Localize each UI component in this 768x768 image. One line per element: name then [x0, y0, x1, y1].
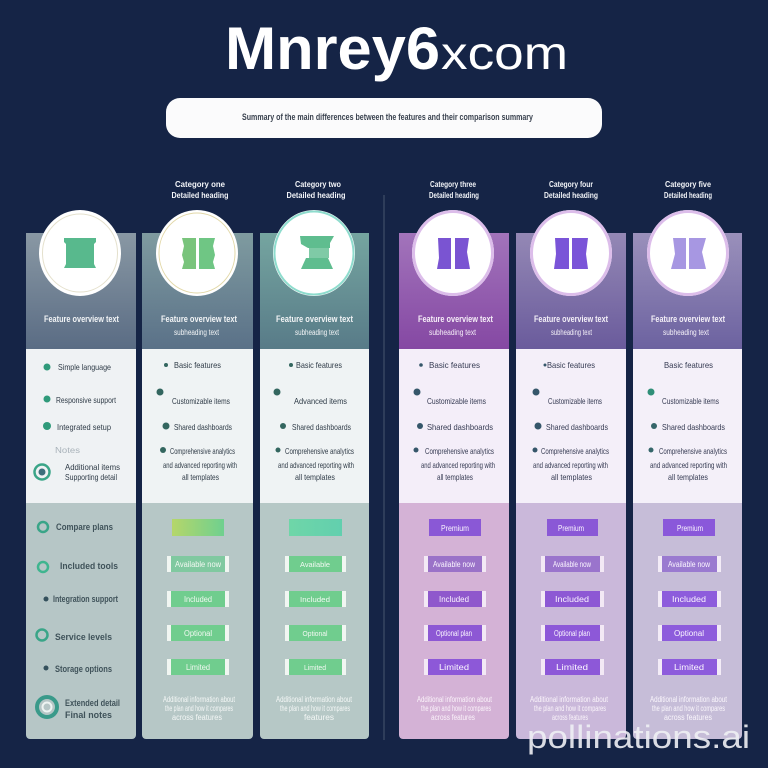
feature list: Shared dashboards — [427, 422, 493, 432]
heading: subheading text — [429, 328, 477, 337]
button labels: Limited — [304, 663, 326, 672]
feature list: Responsive support — [56, 395, 116, 405]
column labels: Category two — [295, 179, 341, 189]
footer note — [417, 695, 493, 722]
heading: Feature overview text — [534, 314, 609, 325]
button labels: Included — [672, 595, 706, 604]
button labels: Included — [555, 595, 589, 604]
footer note: Additional information about — [163, 695, 236, 704]
feature list: Basic features — [547, 360, 595, 370]
button labels: Included — [184, 595, 212, 604]
subtitle pill — [166, 98, 602, 138]
button labels: Available now — [175, 560, 221, 569]
button labels: Available — [300, 560, 330, 569]
column labels: Detailed heading — [172, 190, 228, 200]
feature list: Comprehensive analytics — [659, 446, 727, 456]
feature list: Customizable items — [662, 396, 719, 406]
center divider — [384, 195, 385, 740]
column labels: Detailed heading — [286, 190, 346, 200]
list icons — [648, 388, 657, 452]
footer note: the plan and how it compares — [421, 704, 491, 713]
heading — [276, 314, 354, 337]
feature list — [163, 360, 237, 482]
button labels: Limited — [674, 663, 704, 672]
footer note: features — [304, 713, 334, 722]
footer note — [530, 695, 609, 722]
footer note — [163, 695, 236, 722]
panel: column 1 — [26, 210, 136, 739]
icon: emblem 5 — [530, 210, 612, 296]
button labels: Limited — [439, 663, 469, 672]
buttons — [658, 519, 721, 675]
button labels: Optional — [184, 629, 212, 638]
feature list: and advanced reporting with — [533, 460, 608, 470]
button labels: Available now — [668, 560, 710, 569]
footer note: across features — [664, 713, 712, 722]
button labels: Limited — [186, 663, 210, 672]
feature list: all templates — [437, 472, 473, 482]
bottom list: Storage options — [55, 664, 112, 674]
buttons — [167, 519, 229, 675]
button labels: Included — [300, 595, 330, 604]
feature list: Basic features — [429, 360, 480, 370]
feature list: Shared dashboards — [546, 422, 608, 432]
title: xcom — [441, 27, 568, 79]
column labels: Category five — [665, 179, 711, 189]
button labels: Available now — [553, 560, 591, 569]
footer note — [650, 695, 728, 722]
heading: Feature overview text — [161, 314, 238, 325]
watermark: pollinations.ai — [527, 719, 750, 755]
heading — [534, 314, 609, 337]
feature list: all templates — [295, 472, 335, 482]
heading: Feature overview text — [418, 314, 494, 325]
feature list: and advanced reporting with — [650, 460, 727, 470]
footer note: across features — [431, 713, 475, 722]
bottom list: Service levels — [55, 632, 112, 642]
bottom list: Extended detail — [65, 698, 120, 708]
button labels — [433, 524, 475, 672]
footer note: across features — [172, 713, 222, 722]
icon: emblem 1 — [39, 210, 121, 296]
footer note: the plan and how it compares — [652, 704, 725, 713]
button labels: Premium — [441, 524, 469, 533]
feature list: Additional items — [65, 462, 120, 472]
footer note: Additional information about — [417, 695, 493, 704]
panel: column 6 — [633, 210, 742, 739]
heading: subheading text — [551, 328, 593, 337]
list icons — [34, 364, 51, 480]
panel: column 2 — [142, 210, 253, 739]
icon: emblem 4 — [412, 210, 494, 296]
button labels: Premium — [677, 524, 703, 533]
heading: subheading text — [174, 328, 220, 337]
icon: emblem 6 — [647, 210, 729, 296]
feature list: and advanced reporting with — [421, 460, 495, 470]
feature list — [421, 360, 495, 482]
footer note: the plan and how it compares — [165, 704, 233, 713]
feature list: all templates — [668, 472, 708, 482]
column labels: Detailed heading — [429, 190, 479, 200]
feature list: Comprehensive analytics — [170, 446, 235, 456]
feature list — [533, 360, 609, 482]
feature list: Customizable items — [548, 396, 602, 406]
feature list: Comprehensive analytics — [541, 446, 609, 456]
feature list: Customizable items — [172, 396, 230, 406]
heading: subheading text — [663, 328, 710, 337]
icon: emblem 2 — [156, 210, 238, 296]
heading — [418, 314, 494, 337]
feature list: Comprehensive analytics — [285, 446, 354, 456]
feature list: Basic features — [174, 360, 221, 370]
button labels: Available now — [433, 560, 475, 569]
panel: column 3 — [260, 210, 369, 739]
heading: subheading text — [295, 328, 340, 337]
buttons — [541, 519, 604, 675]
button labels: Limited — [556, 663, 588, 672]
heading — [651, 314, 726, 337]
button labels — [668, 524, 710, 672]
buttons — [424, 519, 486, 675]
button labels — [300, 560, 330, 672]
bottom list — [53, 522, 120, 720]
feature list: Shared dashboards — [174, 422, 232, 432]
heading: Feature overview text — [651, 314, 726, 325]
column labels: Detailed heading — [544, 190, 598, 200]
subtitle pill: Summary of the main differences between the features and their comparison summary — [242, 112, 534, 123]
feature list: Shared dashboards — [292, 422, 351, 432]
footer note: Additional information about — [530, 695, 609, 704]
feature list: Basic features — [664, 360, 713, 370]
button labels — [175, 560, 221, 672]
feature list: Simple language — [58, 362, 111, 372]
footer note: Additional information about — [650, 695, 728, 704]
bottom list: Integration support — [53, 594, 118, 604]
feature list: Supporting detail — [65, 472, 117, 482]
title — [225, 15, 568, 82]
list icons — [274, 363, 293, 452]
heading: Feature overview text — [276, 314, 354, 325]
footer note: the plan and how it compares — [280, 704, 350, 713]
title: Mnrey6 — [225, 15, 440, 82]
feature list: Customizable items — [427, 396, 486, 406]
column labels: Category one — [175, 179, 225, 189]
icon: emblem 3 — [273, 210, 355, 296]
bottom list: Final notes — [65, 710, 112, 720]
panel: column 4 — [399, 210, 509, 739]
bottom list: Included tools — [60, 561, 118, 571]
footer note: Additional information about — [276, 695, 353, 704]
button labels: Optional — [302, 629, 328, 638]
list icons — [414, 363, 423, 452]
button labels: Optional plan — [436, 629, 472, 638]
feature list — [278, 360, 354, 482]
button labels: Included — [439, 595, 469, 604]
feature list: Integrated setup — [57, 422, 111, 432]
list icons — [156, 363, 170, 453]
button labels: Optional plan — [554, 629, 590, 638]
feature list: all templates — [182, 472, 219, 482]
feature list: all templates — [551, 472, 592, 482]
button labels: Premium — [558, 524, 584, 533]
bottom list: Compare plans — [56, 522, 113, 532]
footer note: the plan and how it compares — [534, 704, 606, 713]
list icons — [532, 364, 546, 452]
column labels: Detailed heading — [664, 190, 712, 200]
feature list: Shared dashboards — [662, 422, 725, 432]
feature list — [650, 360, 727, 482]
feature list: Comprehensive analytics — [425, 446, 494, 456]
button labels: Optional — [674, 629, 704, 638]
feature list: and advanced reporting with — [163, 460, 237, 470]
buttons — [285, 519, 346, 675]
footer note: across features — [552, 713, 588, 722]
column labels: Category four — [549, 179, 594, 189]
feature list: Basic features — [296, 360, 342, 370]
feature list: Advanced items — [294, 396, 347, 406]
column labels: Category three — [430, 179, 476, 189]
heading: Feature overview text — [44, 314, 120, 325]
feature list: Notes — [55, 445, 80, 455]
feature list — [55, 362, 120, 482]
bottom icons — [36, 522, 57, 717]
footer note — [276, 695, 353, 722]
heading — [161, 314, 238, 337]
button labels — [553, 524, 591, 672]
feature list: and advanced reporting with — [278, 460, 354, 470]
panel: column 5 — [516, 210, 626, 739]
column labels — [172, 179, 712, 200]
